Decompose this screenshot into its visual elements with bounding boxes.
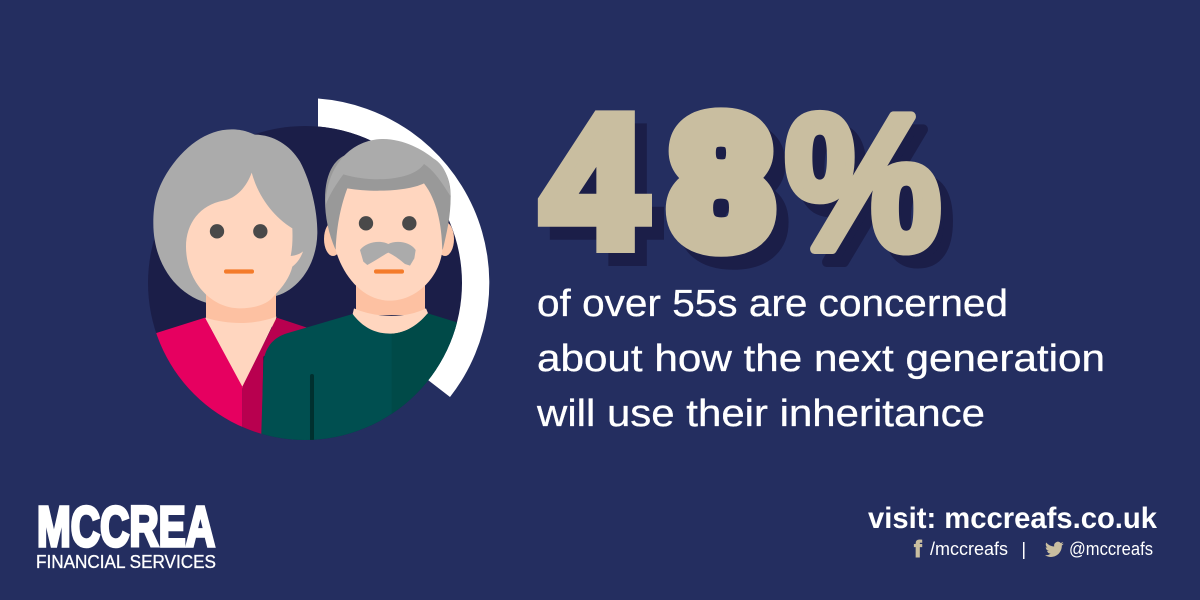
illustration: older couple bbox=[150, 129, 460, 444]
big stat shadow: 48% bbox=[554, 88, 953, 304]
man right eye bbox=[402, 216, 416, 230]
statement text: of over 55s are concerned bbox=[537, 283, 1008, 325]
statement text: about how the next generation bbox=[537, 338, 1105, 380]
man chest bbox=[352, 308, 428, 334]
man left ear bbox=[324, 222, 342, 256]
dark disc behind couple bbox=[148, 126, 462, 440]
big stat: 48%: % bbox=[785, 75, 941, 291]
logo: McCrea Financial Services bbox=[36, 495, 216, 572]
woman neck bbox=[206, 287, 276, 327]
website call to action: visit: mccreafs.co.uk bbox=[868, 502, 1157, 535]
woman right eye bbox=[253, 224, 267, 238]
man face bbox=[336, 183, 442, 301]
man shirt shaded side bbox=[392, 313, 457, 380]
man moustache bbox=[360, 242, 416, 266]
man neck bbox=[356, 285, 425, 315]
man arm line bbox=[310, 374, 314, 444]
man shirt bbox=[261, 313, 460, 443]
woman hair bbox=[153, 129, 317, 305]
woman left eye bbox=[210, 224, 224, 238]
social links bbox=[914, 536, 1153, 562]
twitter handle: @mccreafs bbox=[1069, 539, 1153, 559]
woman mouth bbox=[224, 269, 254, 274]
big stat shadow: 48%: % bbox=[797, 88, 953, 304]
man right ear bbox=[436, 222, 454, 256]
logo strapline: FINANCIAL SERVICES bbox=[36, 552, 216, 572]
man shirt and chest bbox=[261, 308, 460, 444]
big stat: 48%: 4 bbox=[542, 77, 646, 286]
statement text: will use their inheritance bbox=[536, 393, 985, 435]
logo wordmark: MCCREA bbox=[37, 495, 215, 559]
man left eye bbox=[359, 216, 373, 230]
icon: twitter bird bbox=[1045, 542, 1064, 557]
big stat shadow: 48%: 4 bbox=[554, 90, 658, 299]
man top hair bbox=[326, 139, 451, 205]
facebook handle: /mccreafs bbox=[930, 539, 1008, 559]
icon: facebook: f bbox=[914, 536, 922, 562]
progress ring: 48 percent arc bbox=[318, 98, 489, 397]
big stat: 48% bbox=[542, 75, 941, 291]
woman blouse right bbox=[242, 318, 306, 434]
man mouth bbox=[374, 269, 404, 274]
statement text bbox=[536, 283, 1105, 435]
woman figure bbox=[150, 129, 317, 443]
infographic canvas bbox=[37, 98, 1157, 568]
big stat shadow: 48%: 8 bbox=[683, 95, 783, 296]
separator bbox=[1023, 542, 1024, 559]
man side hair bbox=[325, 153, 451, 250]
big stat: 48%: 8 bbox=[671, 82, 771, 283]
woman chest bbox=[205, 317, 277, 388]
woman blouse left bbox=[156, 318, 242, 427]
woman tops bbox=[156, 316, 306, 434]
woman face bbox=[186, 173, 303, 308]
man figure bbox=[261, 139, 460, 444]
